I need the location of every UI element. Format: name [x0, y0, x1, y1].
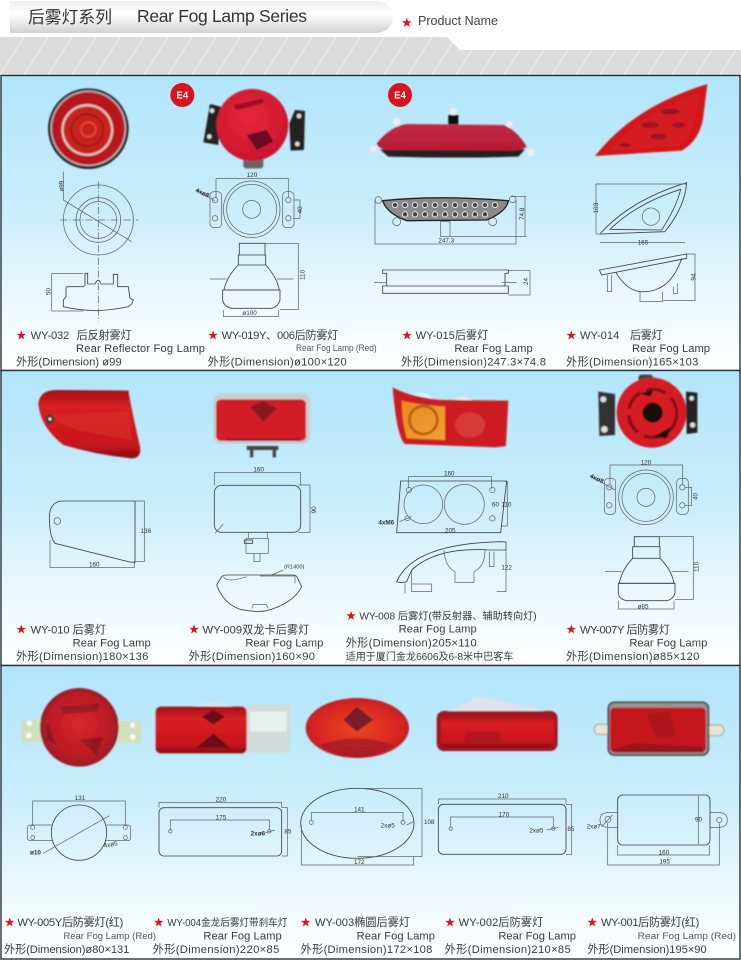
badge: E4: E4	[176, 90, 189, 101]
drawing: WY-008 front and side: 110	[501, 501, 512, 508]
panel: row three	[1, 666, 740, 959]
label: WY-004: 外形(Dimension)220×85	[153, 943, 279, 956]
drawing: WY-003 outline: 141	[354, 806, 365, 813]
photo: WY-032 lamp	[48, 88, 129, 169]
label: WY-010: WY-010 后雾灯	[31, 623, 106, 636]
drawing: WY-003 outline: 172	[354, 859, 365, 866]
label: WY-015	[401, 327, 546, 369]
label: WY-009	[188, 622, 323, 663]
label: WY-032: ★	[16, 327, 27, 342]
title bar	[10, 1, 393, 33]
drawing: WY-007Y front and side	[588, 459, 701, 610]
panel: row two	[1, 370, 740, 666]
drawing: WY-019Y front and side: ø100	[242, 310, 257, 317]
label: WY-005Y: Rear Fog Lamp (Red)	[63, 931, 156, 941]
product name legend: ★	[401, 16, 413, 31]
label: WY-019Y	[207, 327, 377, 369]
label: WY-032: 外形(Dimension) ø99	[16, 356, 122, 369]
drawing: WY-005Y outline: ø10	[30, 850, 41, 857]
drawing: WY-015 front and side: 74.8	[519, 207, 526, 220]
product: WY-002	[437, 697, 576, 956]
drawing: WY-005Y outline	[27, 795, 131, 860]
drawing: WY-004 outline: 220	[216, 797, 227, 804]
photo: WY-019Y lamp	[203, 89, 305, 168]
product: WY-005Y	[4, 688, 156, 956]
label: WY-014: ★	[566, 327, 577, 342]
label: WY-007Y: ★	[566, 622, 577, 637]
label: WY-019Y: WY-019Y、006后防雾灯	[222, 328, 338, 342]
drawing: WY-007Y front and side: ø85	[638, 603, 649, 610]
drawing: WY-007Y front and side: 4xø8	[588, 473, 605, 485]
drawing: WY-004 outline: 85	[284, 829, 292, 836]
badge: E4	[170, 83, 194, 107]
drawing: WY-019Y front and side: 110	[300, 269, 307, 280]
product: WY-010	[16, 390, 152, 663]
label: WY-002: ★	[444, 914, 456, 929]
label: WY-019Y: 外形(Dimension)ø100×120	[208, 356, 347, 369]
label: WY-003: Rear Fog Lamp	[357, 931, 435, 943]
photo: WY-014 lamp	[595, 84, 707, 156]
drawing: WY-019Y front and side: 4xø8	[194, 187, 211, 200]
drawing: WY-009 front and side: (R1400)	[284, 564, 305, 570]
drawing: WY-002 outline	[438, 793, 575, 854]
photo: WY-007Y lamp	[598, 375, 697, 448]
product: WY-014	[566, 84, 710, 369]
drawing: WY-008 front and side: 4xM6	[378, 519, 395, 526]
label: WY-004: Rear Fog Lamp	[203, 931, 282, 943]
label: WY-032	[16, 327, 205, 369]
photo: WY-005Y lamp	[22, 688, 142, 767]
title bar: Rear Fog Lamp Series	[137, 6, 307, 26]
label: WY-002: WY-002后防雾灯	[459, 915, 543, 929]
drawing: WY-001 outline: 195	[659, 859, 670, 866]
label: WY-015: ★	[401, 327, 413, 342]
drawing: WY-008 front and side: 205	[445, 527, 456, 534]
label: WY-010: 外形(Dimension)180×136	[16, 650, 148, 663]
product: WY-019Y	[170, 83, 377, 369]
drawing: WY-014 front and side: 94	[690, 273, 697, 281]
label: WY-008: Rear Fog Lamp	[399, 624, 477, 636]
label: WY-010	[16, 622, 151, 663]
label: WY-001: ★	[587, 914, 598, 929]
label: WY-004	[153, 914, 287, 956]
label: WY-008: 外形(Dimension)205×110	[346, 637, 477, 650]
title bar: 后雾灯系列	[28, 8, 112, 27]
drawing: WY-008 front and side	[378, 470, 512, 593]
product: WY-003	[300, 698, 435, 956]
drawing: WY-008 front and side: 160	[444, 470, 455, 477]
drawing: WY-009 front and side: 90	[311, 506, 318, 513]
label: WY-015: 外形(Dimension)247.3×74.8	[401, 356, 546, 369]
label: WY-014: 后雾灯	[630, 329, 663, 342]
label: WY-032: 后反射雾灯	[77, 328, 132, 342]
drawing: WY-007Y front and side: 120	[641, 459, 652, 466]
label: WY-007Y: WY-007Y 后防雾灯	[580, 622, 670, 636]
drawing: WY-009 front and side: 160	[253, 467, 264, 474]
drawing: WY-007Y front and side: 110	[694, 561, 701, 572]
label: WY-007Y: Rear Fog Lamp	[629, 638, 707, 650]
label: WY-001: 外形(Dimension)195×90	[587, 943, 707, 956]
drawing: WY-007Y front and side: 40	[692, 492, 699, 500]
drawing: WY-014 front and side: 165	[638, 240, 649, 247]
label: WY-003: ★	[300, 914, 311, 929]
label: WY-009: ★	[188, 622, 200, 637]
drawing: WY-001 outline: 90	[695, 817, 703, 824]
photo: WY-003 lamp	[306, 698, 409, 758]
drawing: WY-001 outline: 160	[659, 849, 670, 856]
label: WY-001: Rear Fog Lamp (Red)	[638, 931, 736, 941]
label: WY-015: WY-015后雾灯	[416, 329, 488, 342]
label: WY-019Y: ★	[207, 327, 219, 342]
drawing: WY-004 outline: 2xø6	[251, 831, 266, 838]
photo: WY-002 lamp	[437, 697, 558, 751]
badge: E4: E4	[394, 90, 407, 101]
photo: WY-009 lamp	[213, 393, 310, 457]
label: WY-032: WY-032	[31, 330, 69, 342]
product: WY-001	[587, 702, 736, 956]
label: WY-009: 外形(Dimension)160×90	[189, 650, 315, 663]
drawing: WY-005Y outline: 4xø5	[103, 840, 119, 850]
label: WY-005Y: ★	[4, 914, 15, 929]
drawing: WY-019Y front and side: 40	[297, 206, 304, 213]
drawing: WY-014 front and side: 103	[593, 202, 600, 213]
label: WY-002	[444, 914, 576, 956]
drawing: WY-015 front and side: 247.3	[438, 238, 455, 245]
product: WY-009	[188, 393, 323, 663]
drawing: WY-004 outline	[159, 797, 292, 856]
drawing: WY-032 front and side: ø99	[58, 180, 65, 192]
label: WY-004: ★	[153, 914, 164, 929]
drawing: WY-010 outline	[49, 501, 152, 569]
product: WY-032	[16, 88, 205, 369]
label: WY-003: WY-003椭圆后雾灯	[315, 915, 410, 929]
label: WY-005Y: WY-005Y后防雾灯(红)	[17, 915, 124, 929]
drawing: WY-032 front and side: 50	[46, 287, 53, 295]
panel: row one	[1, 76, 740, 370]
drawing: WY-002 outline: 85	[567, 826, 575, 833]
drawing: WY-005Y outline: 131	[75, 795, 86, 802]
drawing: WY-003 outline	[301, 788, 435, 866]
drawing: WY-002 outline: 170	[499, 812, 510, 819]
label: WY-008: ★	[345, 608, 357, 623]
drawing: WY-003 outline: 108	[424, 819, 435, 826]
drawing: WY-015 front and side	[374, 196, 530, 295]
label: WY-007Y: 外形(Dimension)ø85×120	[566, 650, 699, 663]
product name legend	[401, 14, 498, 31]
product: WY-007Y	[566, 375, 707, 663]
label: WY-008: WY-008 后雾灯(带反射器、辅助转向灯)	[359, 609, 537, 622]
drawing: WY-010 outline: 136	[141, 528, 152, 535]
product: WY-015	[370, 83, 546, 369]
drawing: WY-009 front and side	[214, 467, 318, 611]
label: WY-003: 外形(Dimension)172×108	[301, 943, 432, 956]
label: WY-009: WY-009双龙卡后雾灯	[203, 623, 309, 636]
photo: WY-010 lamp	[38, 390, 140, 458]
drawing: WY-008 front and side: 60	[492, 501, 500, 508]
label: WY-002: Rear Fog Lamp	[498, 931, 576, 943]
label: WY-014: WY-014	[580, 330, 619, 342]
label: WY-008	[345, 608, 537, 663]
drawing: WY-032 front and side	[46, 172, 138, 322]
label: WY-003	[300, 914, 435, 956]
label: WY-004: WY-004金龙后雾灯带刹车灯	[167, 916, 287, 929]
label: WY-009: Rear Fog Lamp	[245, 638, 323, 650]
label: WY-008: 适用于厦门金龙6606及6-8米中巴客车	[346, 650, 513, 663]
photo: WY-004 lamp	[156, 703, 290, 753]
photo: WY-008 lamp	[393, 387, 508, 447]
label: WY-002: 外形(Dimension)210×85	[445, 943, 571, 956]
label: WY-010: Rear Fog Lamp	[73, 638, 151, 650]
label: WY-014: 外形(Dimension)165×103	[566, 356, 698, 369]
drawing: WY-001 outline: 2xø7	[587, 824, 601, 831]
label: WY-014	[566, 327, 710, 369]
drawing: WY-002 outline: 210	[498, 793, 509, 800]
drawing: WY-008 front and side: 122	[501, 564, 512, 571]
drawing: WY-010 outline: 160	[89, 562, 100, 569]
hatched band	[0, 37, 741, 75]
label: WY-005Y	[4, 914, 156, 956]
product: WY-008	[345, 387, 537, 663]
photo: WY-015 lamp	[370, 108, 534, 158]
label: WY-015: Rear Fog Lamp	[454, 343, 533, 355]
label: WY-007Y	[566, 622, 707, 663]
label: WY-001: WY-001后防雾灯(红)	[601, 915, 700, 929]
label: WY-010: ★	[16, 622, 27, 637]
label: WY-019Y: Rear Fog Lamp (Red)	[296, 343, 377, 353]
photo: WY-001 lamp	[594, 702, 724, 755]
badge: E4	[388, 83, 412, 107]
label: WY-001	[587, 914, 736, 956]
label: WY-032: Rear Reflector Fog Lamp	[76, 343, 205, 355]
drawing: WY-003 outline: 2xø5	[381, 823, 395, 830]
drawing: WY-019Y front and side: 120	[247, 172, 258, 179]
product name legend: Product Name	[418, 14, 498, 28]
drawing: WY-002 outline: 2xø5	[529, 827, 544, 834]
drawing: WY-014 front and side	[593, 183, 697, 302]
drawing: WY-001 outline	[587, 795, 727, 866]
label: WY-014: Rear Fog Lamp	[632, 343, 710, 355]
drawing: WY-015 front and side: 24	[523, 277, 530, 285]
drawing: WY-004 outline: 175	[216, 814, 227, 821]
drawing: WY-019Y front and side	[194, 172, 307, 317]
label: WY-005Y: 外形(Dimension)ø80×131	[4, 943, 129, 956]
product: WY-004	[153, 703, 292, 956]
